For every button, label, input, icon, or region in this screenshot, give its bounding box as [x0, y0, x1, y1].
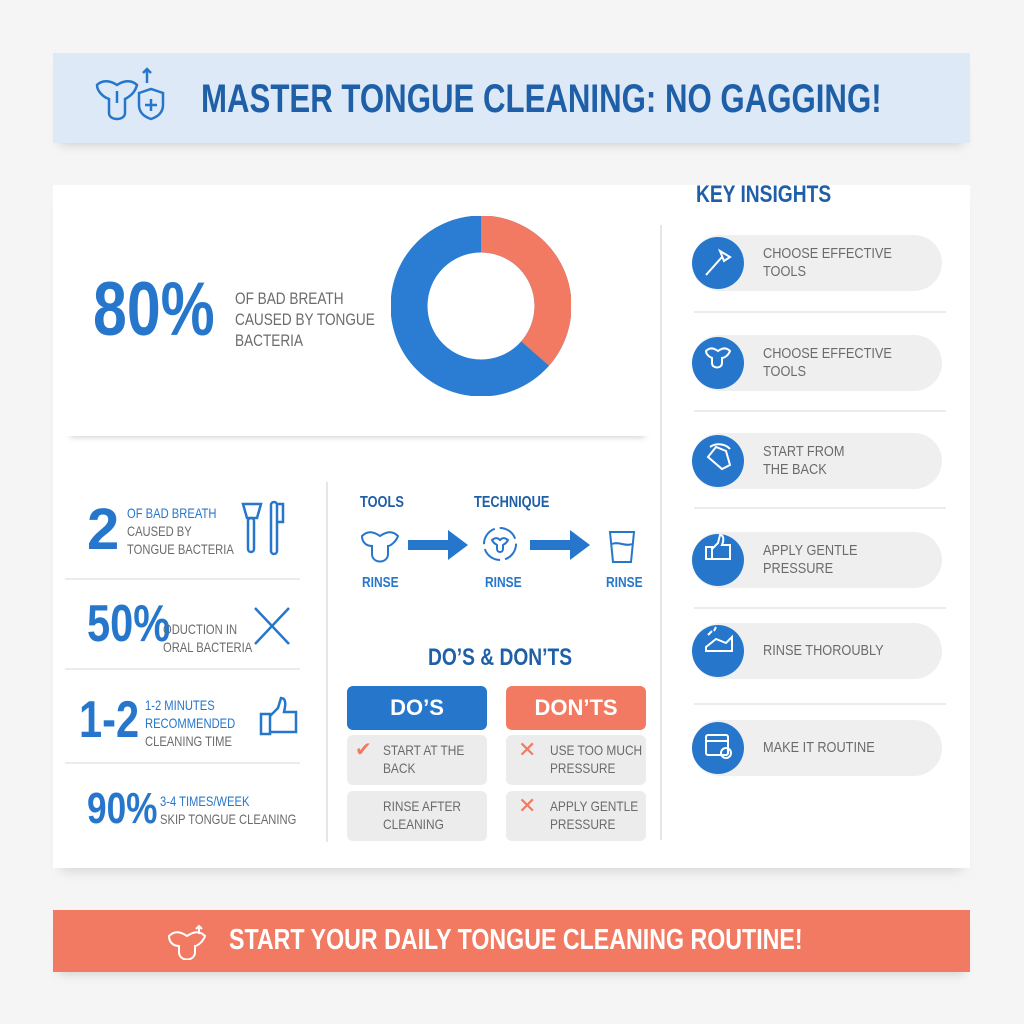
insight 1 — [692, 235, 942, 291]
step: tools: TOOLS — [360, 494, 404, 511]
don't item 2: PRESSURE — [550, 816, 615, 832]
bottom banner — [53, 910, 970, 972]
title: MASTER TONGUE CLEANING: NO GAGGING! — [201, 77, 882, 121]
insight 3 — [692, 433, 942, 489]
stat description: OF BAD BREATH — [235, 289, 344, 308]
stat: 90%: 90% — [87, 784, 157, 833]
do's header — [347, 686, 487, 730]
insight 5 — [692, 623, 942, 679]
stats list: ORAL BACTERIA — [163, 639, 252, 655]
do item 2 — [347, 791, 487, 841]
panel: 80% stat with donut — [65, 200, 650, 436]
stats list: ODUCTION IN — [163, 621, 237, 637]
don't item 1: ✕ — [518, 737, 536, 762]
arrow — [530, 530, 590, 560]
panel: do's — [347, 686, 487, 841]
insight 6: MAKE IT ROUTINE — [763, 739, 875, 756]
icons in circles — [705, 248, 733, 759]
call to action text: START YOUR DAILY TONGUE CLEANING ROUTINE! — [229, 924, 803, 956]
insight 2 — [692, 335, 942, 391]
insight 2: TOOLS — [763, 363, 806, 380]
step: rinse glass — [608, 531, 636, 563]
arrow — [408, 530, 468, 560]
header banner — [53, 53, 970, 143]
do item 1 — [347, 735, 487, 785]
do item 2: RINSE AFTER — [383, 798, 461, 814]
don'ts header: DON’TS — [534, 695, 618, 720]
stats list — [65, 497, 300, 833]
process flow: RINSE — [485, 574, 522, 591]
do item 1: ✔ — [355, 739, 372, 761]
big number 80%: 80% — [93, 267, 215, 352]
step: technique: TECHNIQUE — [474, 494, 549, 511]
insight 5: RINSE THOROUBLY — [763, 642, 884, 659]
icon: scraper and brush — [241, 500, 284, 556]
icon: tongue with shield — [96, 67, 164, 120]
icon: crossed tools — [254, 607, 290, 645]
stats list: OF BAD BREATH — [127, 505, 216, 521]
process flow: RINSE — [362, 574, 399, 591]
do item 1: BACK — [383, 760, 415, 776]
insight 4: APPLY GENTLE — [763, 542, 857, 559]
stats list: CLEANING TIME — [145, 733, 232, 749]
stats list: RECOMMENDED — [145, 715, 235, 731]
insight 1: TOOLS — [763, 263, 806, 280]
don't item 1 — [506, 735, 646, 785]
stats list: 3-4 TIMES/WEEK — [160, 793, 249, 809]
stat: 1-2: 1-2 — [79, 691, 139, 749]
panel: don'ts — [506, 686, 646, 841]
donut chart — [391, 216, 571, 396]
insight 4 — [692, 532, 942, 588]
icon: tongue — [168, 924, 206, 960]
heading: do's and don'ts: DO’S & DON’TS — [428, 644, 572, 671]
insight 3: THE BACK — [763, 461, 827, 478]
vertical divider — [660, 225, 662, 840]
stat description: CAUSED BY TONGUE — [235, 310, 375, 329]
do item 2: CLEANING — [383, 816, 444, 832]
stats list: SKIP TONGUE CLEANING — [160, 811, 296, 827]
do item 1: START AT THE — [383, 742, 464, 758]
don't item 1: PRESSURE — [550, 760, 615, 776]
stat: 2: 2 — [87, 497, 119, 562]
don't item 2: ✕ — [518, 793, 536, 818]
don'ts header — [506, 686, 646, 730]
stat description: BACTERIA — [235, 331, 303, 350]
insight 4: PRESSURE — [763, 560, 833, 577]
insight 6 — [692, 720, 942, 776]
heading: key insights: KEY INSIGHTS — [696, 181, 831, 208]
insight 2: CHOOSE EFFECTIVE — [763, 345, 892, 362]
stats list: CAUSED BY — [127, 523, 192, 539]
do's header: DO’S — [390, 695, 444, 720]
insight 1: CHOOSE EFFECTIVE — [763, 245, 892, 262]
stat: 50%: 50% — [87, 595, 170, 653]
icon: thumbs up — [260, 696, 298, 736]
don't item 2 — [506, 791, 646, 841]
insight 3: START FROM — [763, 443, 844, 460]
don't item 2: APPLY GENTLE — [550, 798, 638, 814]
don't item 1: USE TOO MUCH — [550, 742, 642, 758]
stats list: 1-2 MINUTES — [145, 697, 215, 713]
process flow — [360, 494, 643, 591]
stat description — [235, 289, 375, 350]
stats list: TONGUE BACTERIA — [127, 541, 234, 557]
process flow: RINSE — [606, 574, 643, 591]
main card — [53, 185, 970, 868]
